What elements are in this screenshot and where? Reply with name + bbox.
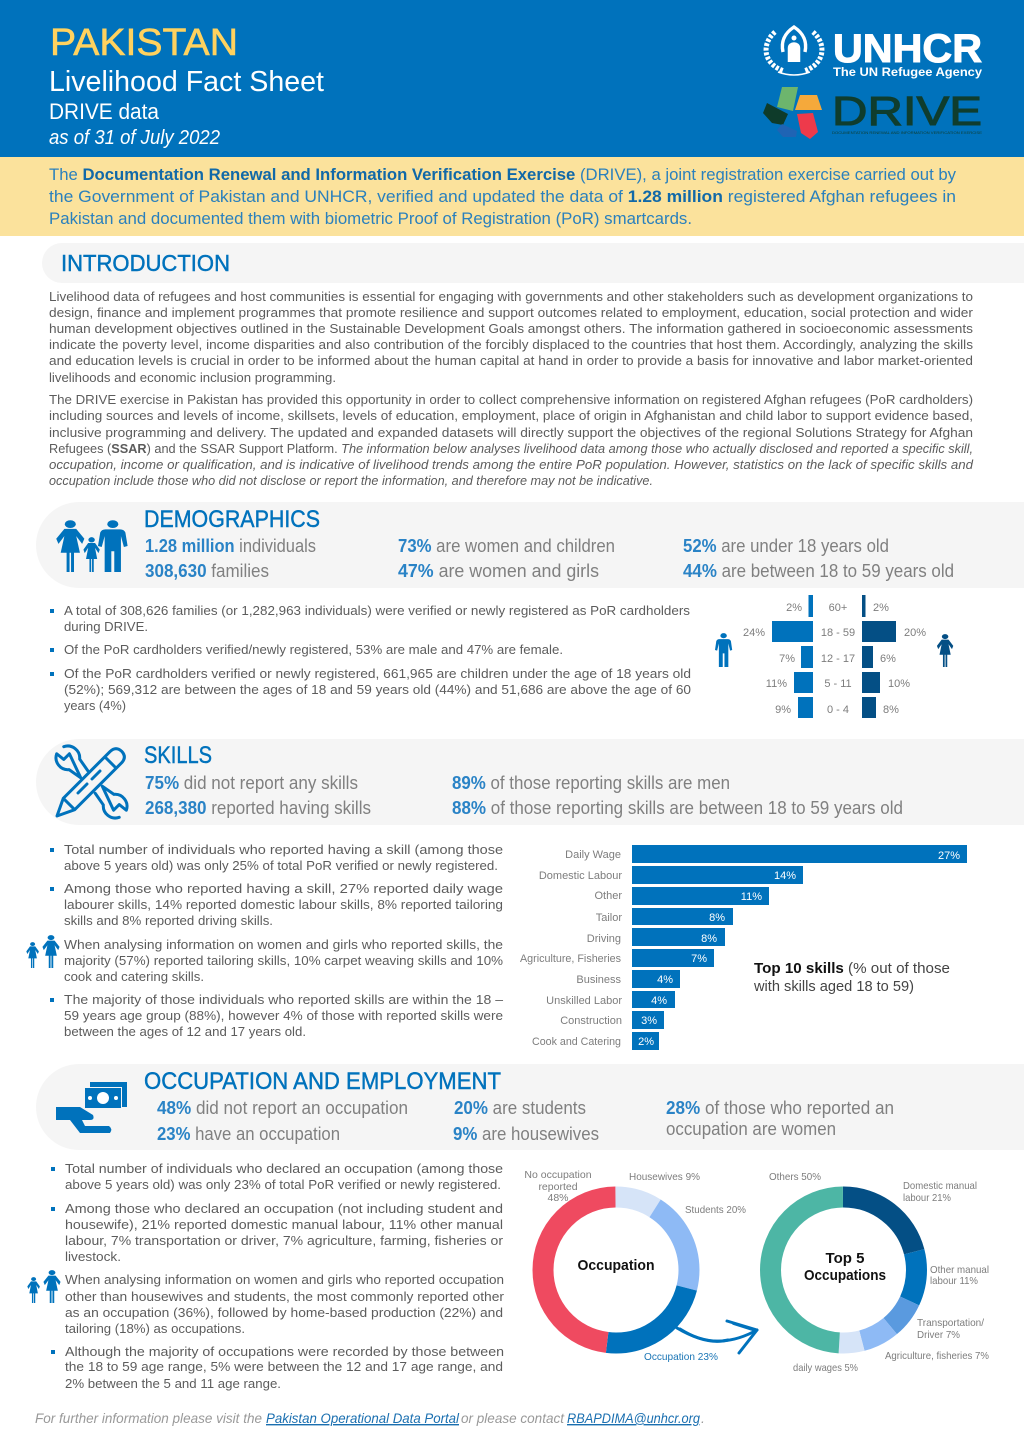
skill category labels [520,849,622,1048]
summary text [49,165,956,228]
footer note: For further information please visit the [35,1410,262,1426]
skills bullet list: majority (57%) reported tailoring skills, 10% carpet weaving skills and 10% [64,954,503,968]
donut labels: Occupation 23% [644,1351,718,1363]
skill value labels: 2% [638,1036,654,1048]
introduction paragraph 1: Livelihood data of refugees and host communities is essential for engaging with governments and other stakeholders such as development organizations to [49,290,973,304]
skill value labels: 4% [657,974,673,986]
section: demographics [36,502,1024,718]
occupation heading: OCCUPATION AND EMPLOYMENT [144,1068,501,1095]
summary band [0,157,1024,236]
skills bullet list [50,843,503,1039]
female percentages: 20% [904,627,926,639]
female bars [862,595,896,718]
title: Pakistan: PAKISTAN [50,22,238,64]
logo: UNHCR wordmark: UNHCR [833,27,982,71]
donut labels: labour 21% [903,1192,951,1204]
demographics key figures: 44% are between 18 to 59 years old [683,561,954,581]
male percentages: 24% [743,627,765,639]
skills bullet list: between the ages of 12 and 17 years old. [64,1025,306,1039]
donut segments [543,1197,689,1343]
chart caption: Top 10 skills (% out of those [754,960,950,977]
donut labels [524,1169,746,1363]
skills key figures [145,773,903,818]
donut labels: Transportation/ [917,1317,984,1329]
male bars [772,595,813,718]
skills bullet list: skills and 8% reported driving skills. [64,914,273,928]
occupation bullet list: labour, 7% transportation or driver, 7% agriculture, farming, fisheries or [65,1234,503,1248]
introduction heading bar [42,243,1024,283]
occupation header panel [36,1064,1024,1150]
introduction paragraph 1: indicate the poverty level, income disparities and also contribution of the forcibly displaced to the countries that host them. Accordingly, analyzing the skills [49,338,973,352]
donut labels: Students 20% [685,1204,746,1216]
icon: woman and girl [27,1270,61,1303]
female percentages: 10% [888,678,910,690]
skill category labels: Business [576,974,621,986]
skill value labels: 7% [691,953,707,965]
male percentages: 11% [766,678,787,690]
logo: DRIVE wordmark: DRIVE [832,88,982,134]
icon: wrench and pencil [52,742,131,822]
skills key figures: 88% of those reporting skills are between 18 to 59 years old [452,798,903,818]
female percentages [873,602,926,716]
occupation key figures: 28% of those who reported an [666,1098,894,1118]
skills bullet list: labourer skills, 14% reported domestic labour skills, 8% reported tailoring [64,898,503,912]
introduction paragraph 2 [49,393,974,488]
occupation bullet list: tailoring (18%) as occupations. [65,1322,245,1336]
skill category labels: Daily Wage [565,849,621,861]
skill value labels: 11% [741,891,762,903]
skill category labels: Tailor [596,912,622,924]
occupation bullet list: livestock. [65,1250,121,1264]
skill category labels: Domestic Labour [539,870,622,882]
demographics bullet list: Of the PoR cardholders verified or newly registered, 661,965 are children under the age of 18 years old [64,667,691,681]
skills bullet list: The majority of those individuals who reported skills are within the 18 – [64,993,503,1007]
introduction heading: INTRODUCTION [61,250,230,276]
introduction paragraph 1 [49,290,973,385]
age group labels: 5 - 11 [824,678,852,690]
occupation donut chart [524,1169,746,1363]
section: occupation and employment [27,1064,1024,1391]
skill value labels: 3% [641,1015,657,1027]
donut segments [770,1197,916,1343]
logo: UNHCR tagline: The UN Refugee Agency [833,65,982,79]
icon: family [56,520,128,572]
icon: woman [937,634,953,667]
occupation bullet list: Although the majority of occupations were recorded by those between [65,1345,504,1359]
icon: hand with money [56,1082,127,1133]
skill value labels [638,850,960,1048]
skill value labels: 27% [938,850,960,862]
top 5 occupations donut chart [769,1171,989,1374]
skill value labels: 8% [701,933,717,945]
donut labels: Housewives 9% [629,1171,700,1183]
occupation key figures: occupation are women [666,1119,836,1139]
demographics bullet list: (52%); 569,312 are between the ages of 18 and 59 years old (44%) and 51,686 are above the age of 60 [64,683,691,697]
male percentages [743,602,802,716]
occupation bullet list: Total number of individuals who declared an occupation (among those [65,1162,503,1176]
skill value labels: 8% [709,912,725,924]
occupation bullet list [51,1162,504,1391]
footer note: . [701,1410,705,1426]
footer note: Pakistan Operational Data Portal [266,1410,460,1426]
demographics bullet list: years (4%) [64,699,126,713]
skills heading: SKILLS [144,742,212,769]
skill category labels: Driving [587,933,621,945]
demographics bullet list: A total of 308,626 families (or 1,282,963 individuals) were verified or newly registered as PoR cardholders [64,604,690,618]
donut labels: daily wages 5% [793,1362,858,1374]
header banner [0,0,1024,157]
male percentages: 9% [775,704,791,716]
occupation bullet list: other than housewives and students, the most commonly reported other [65,1290,504,1304]
donut labels: Others 50% [769,1171,821,1183]
occupation bullet list: above 5 years old) was only 23% of total PoR verified or newly registered. [65,1178,501,1192]
age group labels: 12 - 17 [821,653,855,665]
introduction paragraph 1: design, finance and implement programmes that promote resilience and support outcomes related to employment, education, social protection and wider [49,306,973,320]
donut centre label [804,1250,886,1284]
occupation key figures: 9% are housewives [453,1124,599,1144]
donut labels: reported [538,1181,578,1193]
age group labels: 60+ [829,602,847,614]
demographics key figures [145,536,954,581]
introduction paragraph 2: including sources and levels of income, skillsets, levels of education, employment, place of origin in Afghanistan and child labor to support evidence based, [49,409,973,423]
skills key figures: 268,380 reported having skills [145,798,371,818]
demographics bullet list: Of the PoR cardholders verified/newly registered, 53% are male and 47% are female. [64,643,563,657]
skill category labels: Construction [560,1015,622,1027]
introduction paragraph 2: The DRIVE exercise in Pakistan has provided this opportunity in order to collect comprehensive information on registered Afghan refugees (PoR cardholders) [49,393,973,407]
skills bullet list: Total number of individuals who reported having a skill (among those [64,843,503,857]
skills header panel [36,739,1024,825]
footer note: RBAPDIMA@unhcr.org [567,1410,700,1426]
female percentages: 8% [883,704,899,716]
donut centre label: Top 5 [826,1250,864,1267]
male percentages: 7% [779,653,795,665]
donut labels: labour 11% [930,1275,978,1287]
demographics key figures: 73% are women and children [398,536,615,556]
occupation key figures: 20% are students [454,1098,586,1118]
occupation bullet list: housewife), 21% reported domestic manual labour, 11% other manual [65,1218,503,1232]
data source: DRIVE data [49,99,160,124]
demographics key figures: 52% are under 18 years old [683,536,889,556]
logo: DRIVE tagline: DOCUMENTATION RENEWAL AND INFORMATION VERIFICATION EXERCISE [832,130,982,135]
summary text: the Government of Pakistan and UNHCR, verified and updated the data of 1.28 million registered Afghan refugees in [49,187,956,206]
logo: DRIVE mark [763,87,822,139]
footer note: or please contact [461,1410,565,1426]
skill category labels: Unskilled Labor [546,995,622,1007]
donut labels: No occupation [524,1169,592,1181]
donut labels: 48% [547,1192,569,1204]
demographics header panel [36,502,1024,588]
occupation bullet list: When analysing information on women and girls who reported occupation [65,1273,504,1287]
donut labels: Other manual [930,1264,989,1276]
male percentages: 2% [786,602,802,614]
skill value labels: 4% [651,995,667,1007]
skills bullet list: cook and catering skills. [64,970,204,984]
donut centre label: Occupation [578,1257,654,1274]
occupation key figures: 48% did not report an occupation [157,1098,408,1118]
icon: man [715,633,732,667]
section: introduction [42,243,1024,488]
occupation bullet list: 2% between the 5 and 11 age range. [65,1377,281,1391]
skills key figures: 89% of those reporting skills are men [452,773,730,793]
skill value labels: 14% [774,870,796,882]
donut labels [769,1171,989,1374]
demographics key figures: 47% are women and girls [398,561,599,581]
occupation key figures: 23% have an occupation [157,1124,340,1144]
donut labels: Driver 7% [917,1329,960,1341]
skill category labels: Cook and Catering [532,1036,621,1048]
skill bars [632,845,967,1050]
age group labels: 18 - 59 [821,627,855,639]
donut labels: Domestic manual [903,1180,977,1192]
icon: woman and girl [26,935,60,968]
occupation bullet list: as an occupation (36%), followed by home-based production (22%) and [65,1306,503,1320]
female percentages: 2% [873,602,889,614]
introduction paragraph 2: inclusive programming and delivery. The updated and expanded datasets will directly support the objectives of the regional Solutions Strategy for Afghan [49,426,973,440]
section: skills [26,739,1024,1050]
introduction paragraph 1: human development objectives outlined in the Sustainable Development Goals amongst others. The information gathered in socioeconomic assessments [49,322,973,336]
occupation bullet list: Among those who declared an occupation (not including student and [65,1202,503,1216]
chart caption: with skills aged 18 to 59) [753,978,914,995]
age group labels [821,602,855,716]
skills bullet list: Among those who reported having a skill, 27% reported daily wage [64,882,503,896]
subtitle: Livelihood Fact Sheet [49,66,324,98]
demographics key figures: 1.28 million individuals [145,536,316,556]
donut centre label: Occupations [804,1267,886,1284]
demographics bullet list [50,604,691,713]
introduction paragraph 1: and education levels is crucial in order to be informed about the human capital at hand in order to provide a basis for innovative and labor market-oriented [49,354,973,368]
skills bullet list: When analysing information on women and girls who reported skills, the [64,938,503,952]
summary text: The Documentation Renewal and Information Verification Exercise (DRIVE), a joint registration exercise carried out by [49,165,956,184]
demographics heading: DEMOGRAPHICS [144,506,320,533]
skill category labels: Other [594,890,622,902]
arrow between donuts [677,1321,757,1353]
occupation bullet list: the 18 to 59 age range, 5% were between the 12 and 17 age range, and [65,1360,503,1374]
introduction paragraph 2: occupation include those who did not disclose or report the information, and therefore may not be indicative. [49,474,653,488]
icon: UNHCR emblem [766,27,822,75]
introduction paragraph 2: occupation, income or qualification, and is indicative of livelihood trends among the entire PoR population. However, statistics on the lack of specific skills and [49,458,974,472]
top 10 skills bar chart [520,845,967,1050]
chart caption [753,960,950,995]
introduction paragraph 1: livelihoods and economic inclusion programming. [49,371,336,385]
occupation key figures [157,1098,894,1144]
date: as of 31 of July 2022 [49,127,220,149]
skills key figures: 75% did not report any skills [145,773,358,793]
summary text: Pakistan and documented them with biometric Proof of Registration (PoR) smartcards. [49,209,692,228]
donut labels: Agriculture, fisheries 7% [885,1350,989,1362]
introduction paragraph 2: Refugees (SSAR) and the SSAR Support Platform. The information below analyses livelihood data among those who actually disclosed and reported a specific skill, [49,442,973,456]
footer note [35,1410,705,1426]
demographics key figures: 308,630 families [145,561,269,581]
skill category labels: Agriculture, Fisheries [520,953,621,965]
population pyramid chart [715,595,953,718]
demographics bullet list: during DRIVE. [64,620,148,634]
skills bullet list: 59 years age group (88%), however 4% of those with reported skills were [64,1009,503,1023]
female percentages: 6% [880,653,896,665]
age group labels: 0 - 4 [827,704,849,716]
skills bullet list: above 5 years old) was only 25% of total PoR verified or newly registered. [64,859,498,873]
